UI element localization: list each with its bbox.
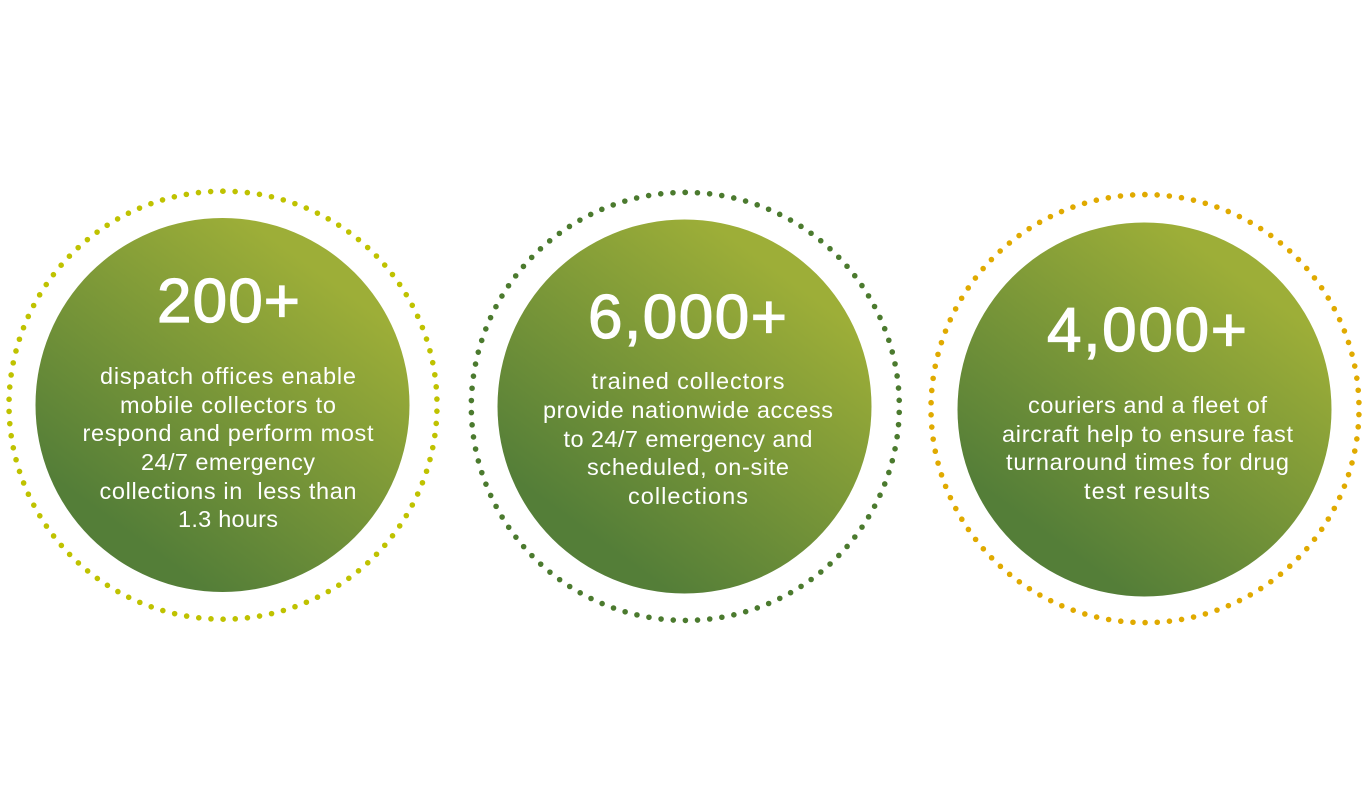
description: couriers and aircraft [1002, 392, 1293, 504]
description: trained collectors: provide nationwide access [543, 397, 833, 423]
panel: couriers and aircraft [931, 195, 1359, 623]
dotted ring: dark green [471, 192, 899, 620]
stat: 6,000+: 6,000+ [588, 283, 787, 352]
stat: 4,000+: 4,000+ [1047, 296, 1247, 365]
description: couriers and aircraft: aircraft help to ensure fast [1002, 421, 1293, 447]
description: trained collectors [543, 368, 833, 509]
description: couriers and aircraft: test results [1084, 478, 1210, 504]
description: trained collectors: trained collectors [592, 368, 784, 394]
description: trained collectors: collections [628, 483, 748, 509]
description: couriers and aircraft: couriers and a fleet of [1028, 392, 1267, 418]
description: trained collectors: to 24/7 emergency and [564, 426, 812, 452]
stat: 200+: 200+ [157, 267, 300, 336]
description: couriers and aircraft: turnaround times for drug [1006, 449, 1289, 475]
gradient disc [498, 220, 872, 594]
description: dispatch offices [82, 363, 374, 532]
description: dispatch offices: 1.3 hours [178, 506, 278, 532]
panel: trained collectors [471, 192, 899, 620]
gradient disc [958, 222, 1332, 596]
description: dispatch offices: mobile collectors to [120, 392, 336, 418]
description: trained collectors: scheduled, on-site [587, 454, 789, 480]
description: dispatch offices: dispatch offices enable [100, 363, 356, 389]
gradient disc [36, 218, 410, 592]
description: dispatch offices: respond and perform most [82, 420, 374, 446]
description: dispatch offices: collections in less than [100, 478, 356, 504]
dotted ring: amber [931, 195, 1359, 623]
panel: dispatch offices [9, 191, 437, 619]
dotted ring: lime [9, 191, 437, 619]
description: dispatch offices: 24/7 emergency [141, 449, 315, 475]
